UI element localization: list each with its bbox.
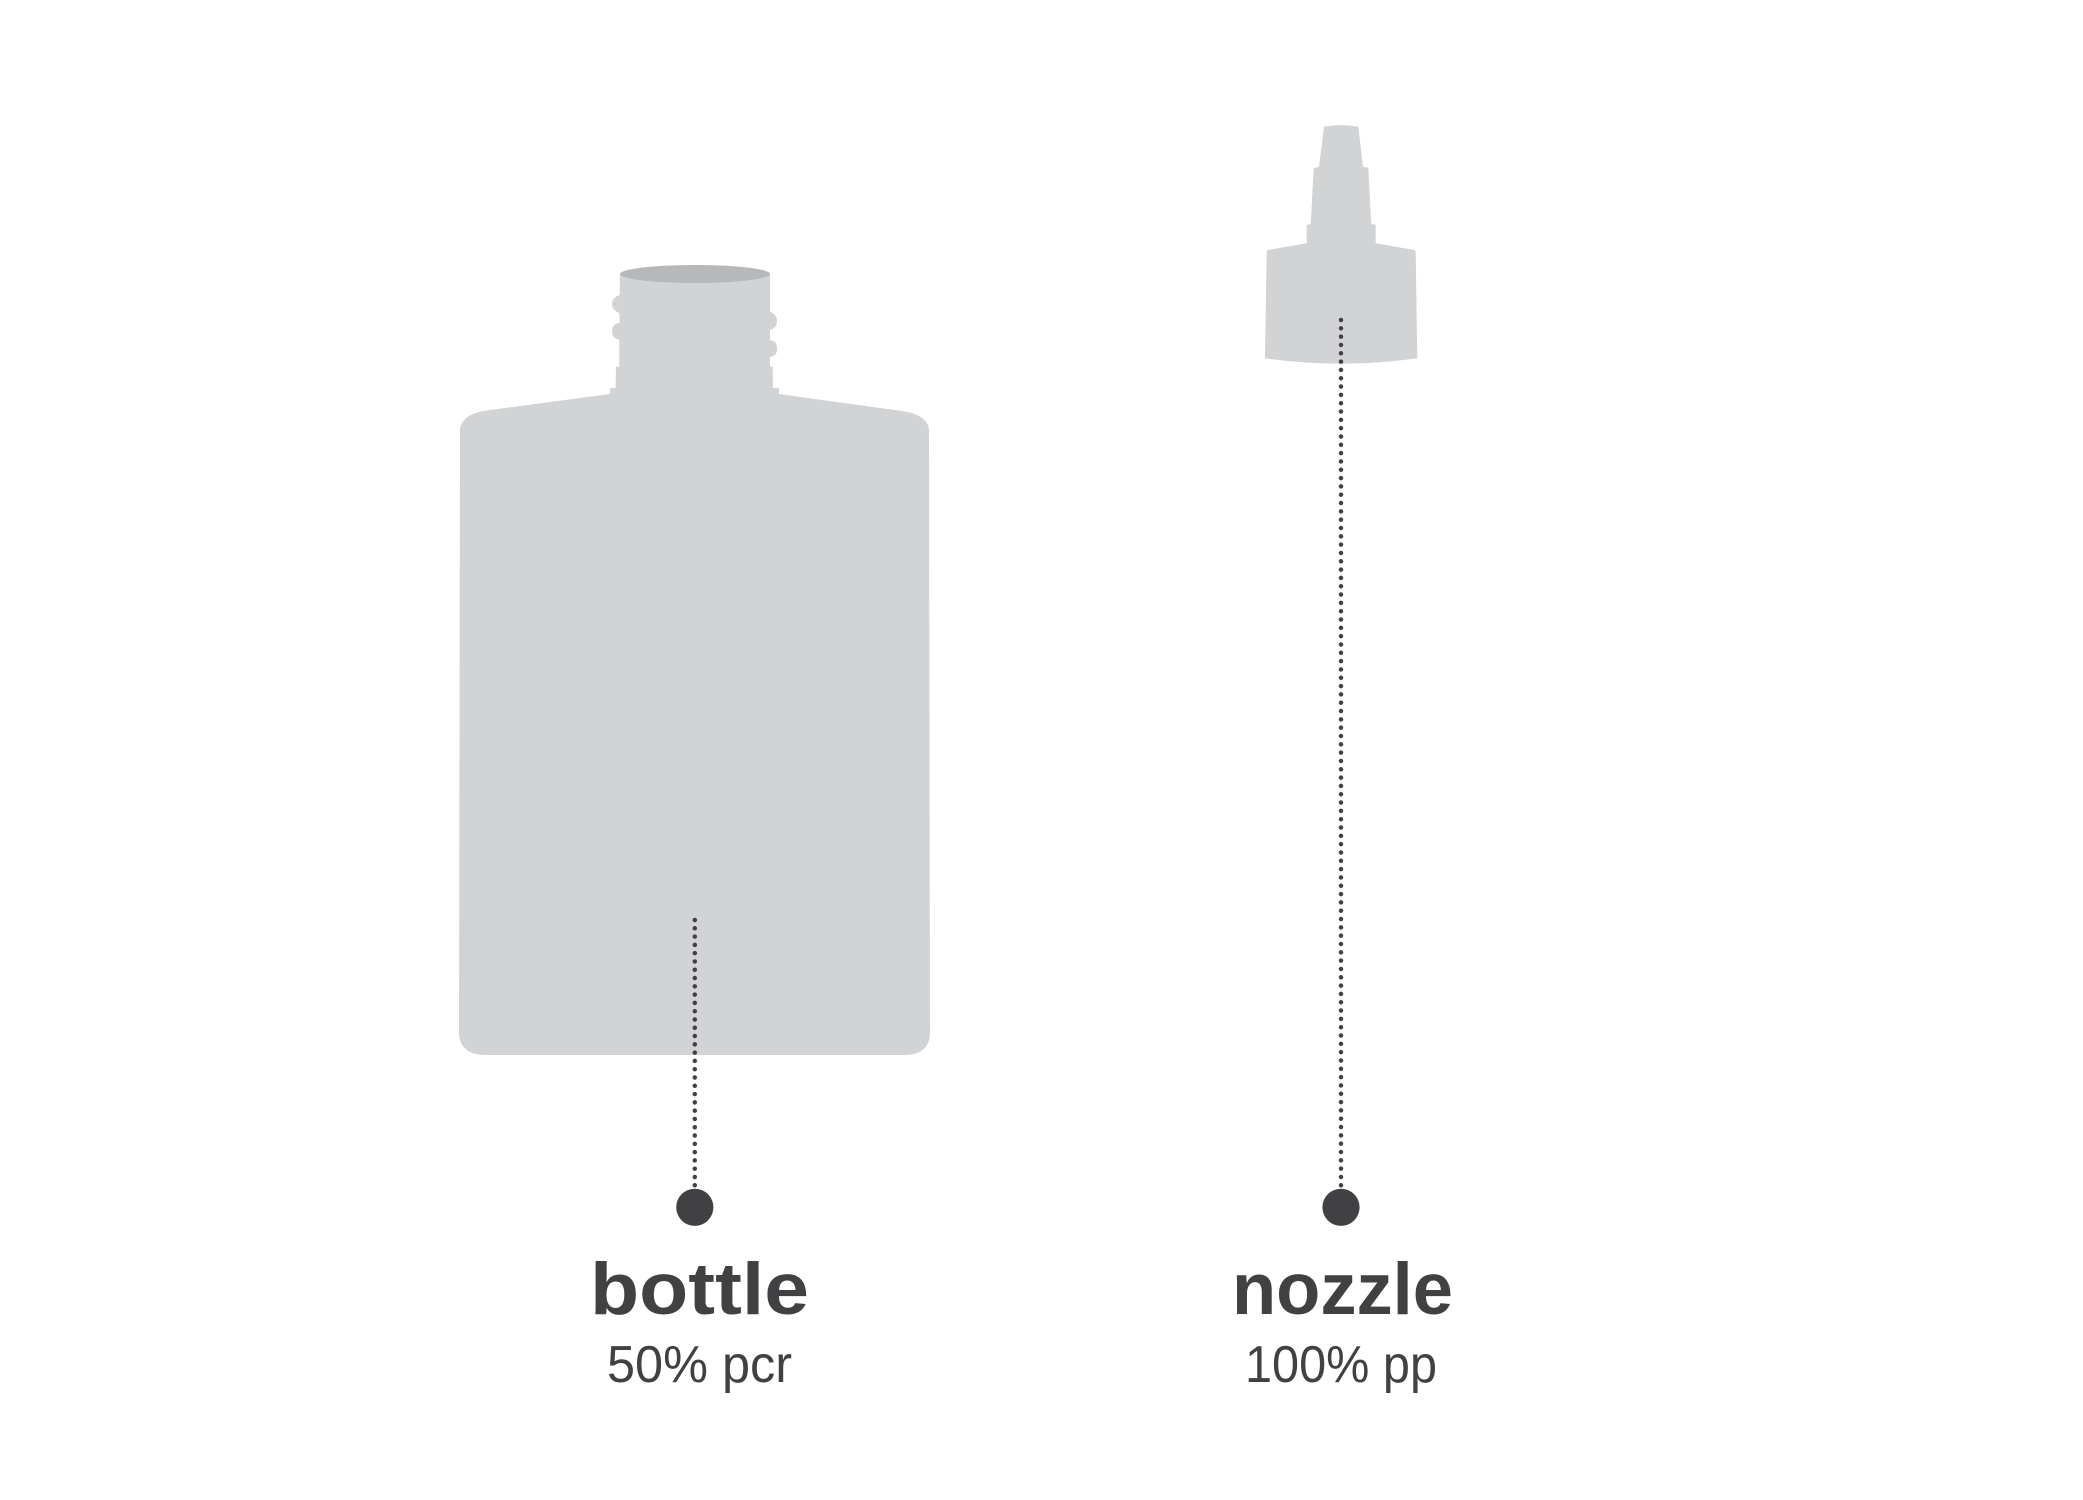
icon: bottle opening xyxy=(620,265,770,283)
bottle marker dot xyxy=(676,1189,713,1226)
nozzle marker dot xyxy=(1322,1189,1360,1226)
bottle dotted leader line xyxy=(693,920,697,1186)
icon: bottle silhouette xyxy=(459,265,930,1055)
label: nozzle: nozzle xyxy=(1232,1249,1453,1330)
label: 50% pcr: 50% pcr xyxy=(607,1336,792,1394)
label: 100% pp: 100% pp xyxy=(1245,1336,1437,1394)
icon: nozzle silhouette xyxy=(1265,125,1417,364)
label: bottle: bottle xyxy=(590,1249,809,1330)
nozzle dotted leader line xyxy=(1339,320,1343,1186)
